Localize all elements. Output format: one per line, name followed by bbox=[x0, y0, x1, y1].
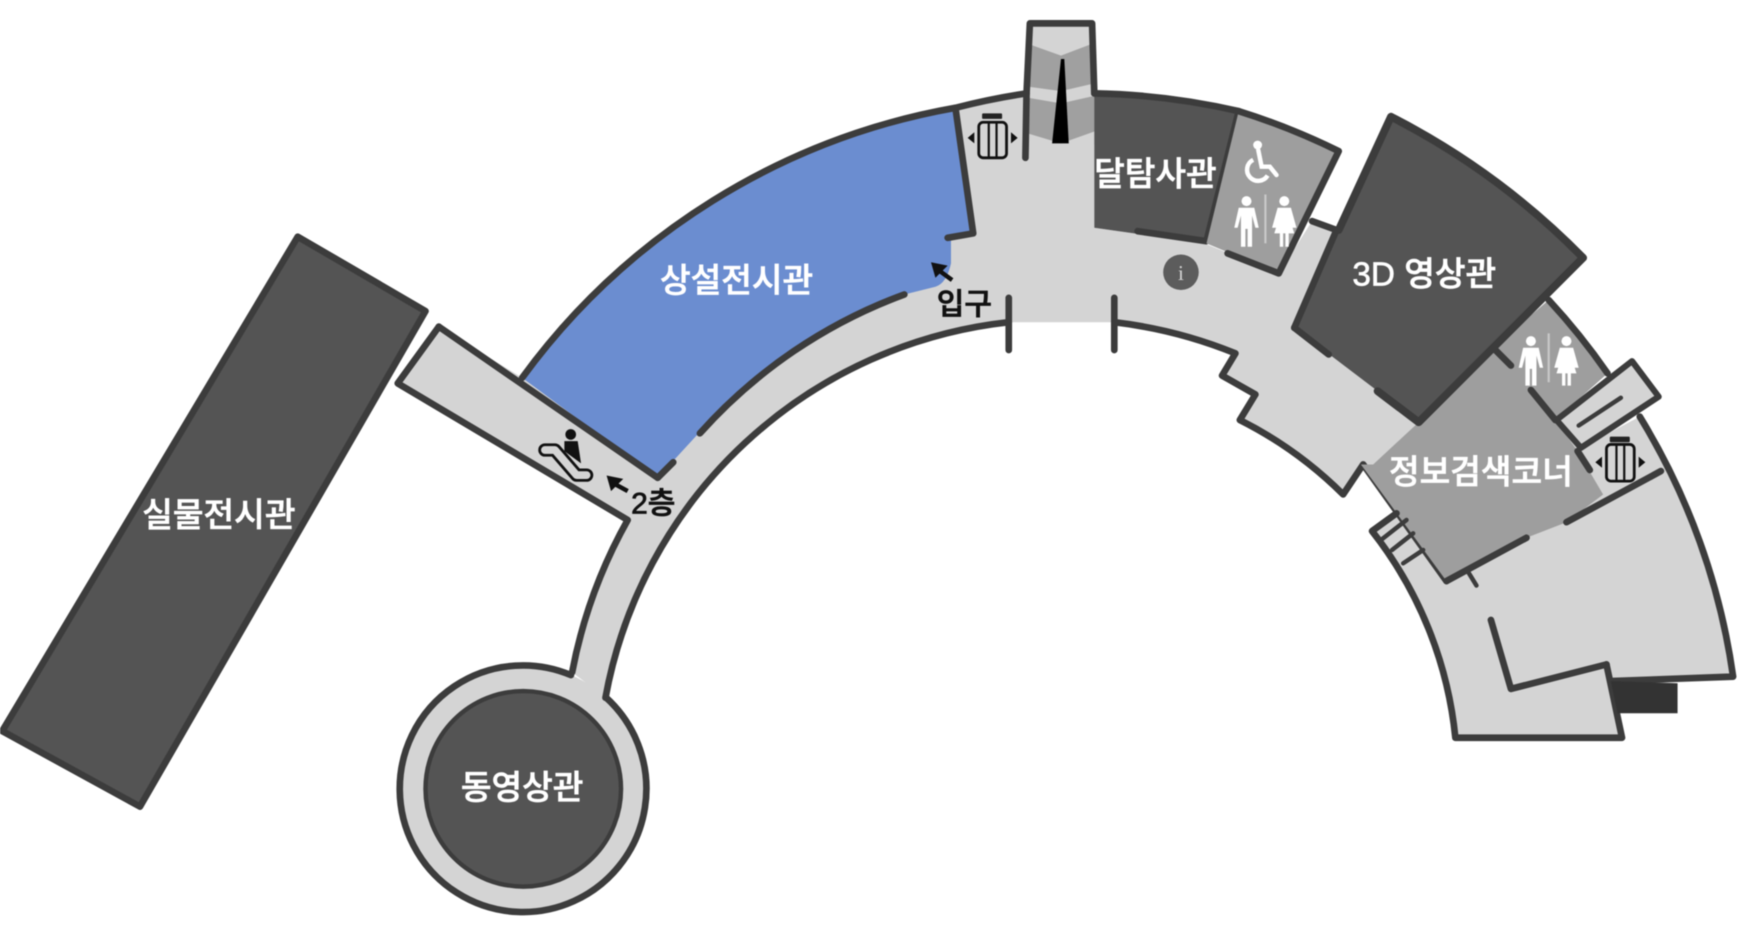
floor: corridors and lobby bbox=[398, 93, 1733, 738]
corridor walls bbox=[398, 93, 1446, 698]
elevator vestibule block bbox=[1556, 361, 1659, 448]
icon: information: i bbox=[1178, 261, 1184, 285]
icon: escalator bbox=[545, 429, 587, 475]
label: 2층 with arrow bbox=[607, 476, 675, 520]
panel: 실물전시관 bbox=[2, 237, 426, 807]
icon: elevator right bbox=[1595, 437, 1645, 481]
panel: 3D 영상관: 3D 영상관 bbox=[1352, 257, 1496, 294]
right hall walls bbox=[1372, 417, 1733, 738]
tower entrance bbox=[1025, 23, 1095, 158]
icon: elevator left bbox=[968, 113, 1018, 158]
label: 입구 with arrow: 입구 bbox=[937, 288, 992, 321]
label: 2층 with arrow: 2층 bbox=[631, 487, 675, 520]
icon: restroom people lower bbox=[1519, 333, 1579, 386]
panel: 실물전시관: 실물전시관 bbox=[142, 498, 295, 535]
panel: 달탐사관: 달탐사관 bbox=[1094, 157, 1217, 194]
icon: wheelchair bbox=[1247, 141, 1277, 181]
panel: 상설전시관 bbox=[439, 108, 973, 478]
panel: 정보검색코너 bbox=[1361, 348, 1661, 581]
panel: 상설전시관: 상설전시관 bbox=[660, 263, 813, 300]
icon: information bbox=[1163, 254, 1199, 290]
panel: 동영상관: 동영상관 bbox=[461, 770, 583, 807]
stairs bbox=[1381, 520, 1423, 563]
icon: restroom people upper bbox=[1234, 194, 1297, 247]
panel: 동영상관 bbox=[400, 665, 647, 912]
panel: 정보검색코너: 정보검색코너 bbox=[1389, 454, 1573, 491]
panel: 달탐사관 bbox=[1094, 93, 1239, 243]
dark service block bbox=[1611, 681, 1678, 713]
panel: restroom lower bbox=[1493, 300, 1608, 420]
panel: 3D 영상관 bbox=[1294, 117, 1583, 422]
label: 입구 with arrow bbox=[931, 262, 992, 321]
wall stub between restroom and 3D theater bbox=[1312, 221, 1336, 230]
panel: restroom upper bbox=[1207, 111, 1339, 273]
